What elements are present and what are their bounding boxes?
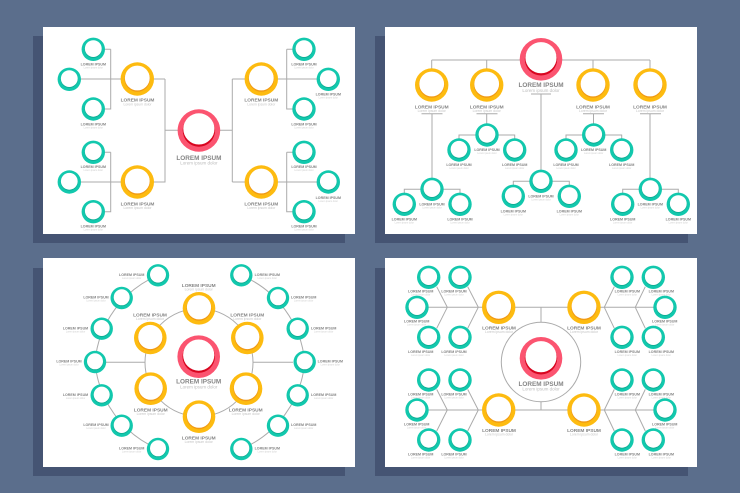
node: gold: LOREM IPSUM: [182, 436, 216, 442]
node: teal: Lorem ipsum dolor: [652, 294, 671, 297]
node: teal right: Lorem ipsum dolor: [294, 299, 314, 302]
central node: LOREM IPSUM: [176, 155, 221, 162]
node: teal: [441, 368, 472, 399]
node: teal cluster D right: LOREM IPSUM: [609, 163, 634, 167]
node: teal right: LOREM IPSUM: [311, 326, 336, 330]
node: teal: Lorem ipsum dolor: [407, 426, 427, 429]
node: teal cluster E left: Lorem ipsum dolor: [613, 221, 633, 224]
node: gold: Lorem ipsum dolor: [136, 317, 165, 321]
node: teal right: LOREM IPSUM: [311, 393, 336, 397]
node: teal cluster C right: [557, 185, 582, 216]
node: teal right: [267, 414, 316, 437]
node: teal cluster D top: LOREM IPSUM: [581, 148, 606, 152]
node: teal: LOREM IPSUM: [408, 350, 433, 354]
node: teal: [441, 326, 472, 357]
node: teal cluster D left: LOREM IPSUM: [553, 163, 579, 167]
node: teal: Lorem ipsum dolor: [411, 294, 431, 297]
node: teal left: [119, 438, 169, 460]
node: teal right: Lorem ipsum dolor: [314, 397, 334, 400]
node: teal: LOREM IPSUM: [615, 350, 640, 354]
node: gold top right: [244, 62, 278, 106]
node: teal: LOREM IPSUM: [81, 225, 106, 229]
node: teal cluster B right: LOREM IPSUM: [502, 163, 527, 167]
node: gold bottom left: LOREM IPSUM: [121, 201, 154, 207]
node: teal: Lorem ipsum dolor: [84, 66, 103, 69]
node: teal cluster B left: Lorem ipsum dolor: [449, 167, 469, 170]
node: teal right: Lorem ipsum dolor: [321, 363, 340, 366]
node: teal: LOREM IPSUM: [404, 422, 429, 426]
node: teal left: LOREM IPSUM: [83, 295, 109, 299]
node: teal: Lorem ipsum dolor: [618, 457, 637, 460]
node: teal: LOREM IPSUM: [291, 123, 317, 127]
node: teal right: [230, 438, 280, 460]
node: teal: LOREM IPSUM: [408, 392, 433, 396]
node: teal right: Lorem ipsum dolor: [294, 427, 314, 430]
central node: LOREM IPSUM: [176, 378, 221, 386]
node: teal: [408, 326, 440, 357]
node: gold bottom left: Lorem ipsum dolor: [123, 206, 152, 210]
node: teal: [291, 97, 317, 130]
node: teal: [81, 38, 106, 69]
node: teal: LOREM IPSUM: [652, 422, 677, 426]
node: teal cluster A top: LOREM IPSUM: [419, 202, 445, 206]
node: gold: Lorem ipsum dolor: [570, 330, 599, 334]
node: teal: Lorem ipsum dolor: [444, 294, 464, 297]
node: teal left: LOREM IPSUM: [56, 359, 82, 363]
node: gold: LOREM IPSUM: [229, 408, 263, 414]
node: teal: LOREM IPSUM: [649, 350, 674, 354]
node: teal: Lorem ipsum dolor: [652, 354, 671, 357]
node: teal: [58, 170, 81, 194]
node: teal: LOREM IPSUM: [441, 453, 467, 457]
node: teal cluster A top: Lorem ipsum dolor: [422, 206, 442, 209]
node: teal left: [63, 318, 113, 340]
node: teal right: Lorem ipsum dolor: [314, 330, 334, 333]
node: gold: Lorem ipsum dolor: [418, 109, 447, 113]
node: teal: LOREM IPSUM: [649, 392, 674, 396]
central node: [176, 335, 221, 389]
node: gold: LOREM IPSUM: [470, 104, 504, 110]
node: gold top left: Lorem ipsum dolor: [123, 102, 152, 106]
node: gold bottom left: [121, 165, 154, 210]
node: teal: LOREM IPSUM: [81, 165, 106, 169]
node: gold: Lorem ipsum dolor: [485, 330, 514, 334]
node: gold bottom right: LOREM IPSUM: [244, 201, 278, 207]
central node: Lorem ipsum dolor: [180, 161, 218, 166]
node: teal cluster C left: [501, 185, 526, 216]
node: teal: Lorem ipsum dolor: [294, 66, 314, 69]
node: teal cluster D left: [553, 138, 579, 170]
node: teal right: Lorem ipsum dolor: [258, 277, 277, 280]
node: teal cluster E right: Lorem ipsum dolor: [669, 221, 688, 224]
node: teal left: [83, 287, 133, 309]
node: gold: LOREM IPSUM: [567, 428, 601, 434]
node: gold: LOREM IPSUM: [182, 283, 216, 289]
node: teal left: [119, 264, 169, 286]
node: teal cluster B right: Lorem ipsum dolor: [505, 167, 525, 170]
node: teal: LOREM IPSUM: [649, 453, 674, 457]
node: gold: Lorem ipsum dolor: [636, 109, 665, 113]
node: teal right: [294, 351, 343, 373]
node: teal: [441, 428, 472, 460]
node: teal cluster A right: Lorem ipsum dolor: [450, 221, 470, 224]
node: teal cluster E top: Lorem ipsum dolor: [641, 206, 660, 209]
node: teal: Lorem ipsum dolor: [294, 169, 314, 172]
node: teal: LOREM IPSUM: [615, 290, 640, 294]
node: teal cluster A left: [392, 193, 417, 224]
node: teal: Lorem ipsum dolor: [294, 127, 314, 130]
node: gold top left: LOREM IPSUM: [121, 98, 154, 104]
node: teal: LOREM IPSUM: [291, 165, 317, 169]
node: teal cluster B top: [474, 123, 500, 155]
node: teal right: Lorem ipsum dolor: [258, 450, 277, 453]
node: teal left: Lorem ipsum dolor: [122, 277, 142, 280]
node: teal: [81, 97, 106, 130]
node: teal: LOREM IPSUM: [291, 225, 317, 229]
node: teal: Lorem ipsum dolor: [618, 354, 637, 357]
node: teal left: LOREM IPSUM: [83, 423, 109, 427]
node: gold: [182, 400, 216, 444]
node: teal: [81, 141, 106, 172]
node: teal: [408, 266, 440, 297]
node: teal: Lorem ipsum dolor: [618, 294, 637, 297]
node: teal: [642, 368, 674, 399]
node: teal left: LOREM IPSUM: [63, 393, 88, 397]
node: gold: LOREM IPSUM: [134, 408, 168, 414]
node: teal: LOREM IPSUM: [441, 350, 467, 354]
node: gold: LOREM IPSUM: [482, 325, 516, 331]
node: teal: Lorem ipsum dolor: [652, 457, 671, 460]
panel: radial map: [33, 258, 355, 476]
node: teal cluster D left: Lorem ipsum dolor: [556, 167, 576, 170]
node: teal: Lorem ipsum dolor: [411, 354, 431, 357]
node: gold: Lorem ipsum dolor: [473, 109, 502, 113]
node: teal: [291, 141, 317, 172]
node: gold: Lorem ipsum dolor: [233, 317, 262, 321]
node: gold: LOREM IPSUM: [230, 313, 264, 319]
node: teal cluster C right: LOREM IPSUM: [557, 209, 582, 213]
panel: symmetric tree: [33, 27, 355, 243]
node: teal cluster A right: LOREM IPSUM: [447, 217, 473, 221]
node: teal right: LOREM IPSUM: [255, 446, 280, 450]
node: teal cluster C top: LOREM IPSUM: [528, 194, 554, 198]
node: teal: Lorem ipsum dolor: [411, 396, 431, 399]
node: gold: [576, 68, 610, 113]
node: teal: [441, 266, 472, 297]
central node: Lorem ipsum dolor: [180, 384, 218, 389]
node: teal left: Lorem ipsum dolor: [59, 363, 79, 366]
node: teal cluster E right: [666, 193, 691, 224]
node: teal: [652, 296, 677, 327]
node: gold: [633, 68, 667, 113]
node: teal cluster B top: Lorem ipsum dolor: [477, 152, 497, 155]
node: gold: [230, 313, 264, 354]
node: gold: LOREM IPSUM: [415, 104, 449, 110]
node: teal: Lorem ipsum dolor: [655, 426, 675, 429]
node: teal: Lorem ipsum dolor: [84, 169, 103, 172]
central node: [518, 38, 564, 93]
node: teal: Lorem ipsum dolor: [294, 229, 314, 232]
node: teal right: [286, 384, 336, 406]
node: gold: Lorem ipsum dolor: [579, 109, 608, 113]
node: teal left: Lorem ipsum dolor: [66, 397, 85, 400]
node: teal: LOREM IPSUM: [404, 320, 429, 324]
node: teal: [652, 398, 677, 429]
node: gold: Lorem ipsum dolor: [137, 412, 166, 416]
node: teal cluster D right: Lorem ipsum dolor: [612, 167, 632, 170]
node: teal right: [230, 264, 280, 286]
node: teal cluster A left: LOREM IPSUM: [392, 217, 417, 221]
node: gold bottom right: Lorem ipsum dolor: [247, 206, 276, 210]
node: teal: Lorem ipsum dolor: [319, 96, 338, 99]
node: gold: LOREM IPSUM: [567, 325, 601, 331]
node: teal: Lorem ipsum dolor: [655, 324, 675, 327]
node: teal cluster E top: [638, 178, 663, 209]
node: teal: [408, 368, 440, 399]
node: teal left: Lorem ipsum dolor: [66, 330, 85, 333]
node: teal: Lorem ipsum dolor: [444, 457, 464, 460]
node: teal left: LOREM IPSUM: [119, 273, 144, 277]
node: teal cluster B left: LOREM IPSUM: [446, 163, 472, 167]
node: teal left: Lorem ipsum dolor: [86, 427, 106, 430]
node: teal cluster A right: [447, 193, 473, 224]
node: teal: LOREM IPSUM: [291, 62, 317, 66]
node: teal: [81, 200, 106, 232]
panel: org chart: [375, 27, 697, 243]
node: teal left: Lorem ipsum dolor: [86, 299, 106, 302]
node: teal: [610, 266, 640, 297]
node: teal: [610, 326, 640, 357]
node: teal: Lorem ipsum dolor: [319, 200, 338, 203]
node: teal left: [56, 351, 106, 373]
central node: LOREM IPSUM: [518, 381, 564, 388]
node: teal: Lorem ipsum dolor: [84, 229, 103, 232]
node: teal cluster A top: [419, 178, 445, 209]
node: gold: [470, 68, 504, 113]
node: teal: [404, 296, 429, 327]
node: teal left: [83, 414, 133, 437]
node: teal right: LOREM IPSUM: [318, 359, 343, 363]
node: teal: LOREM IPSUM: [441, 392, 467, 396]
central node: [518, 337, 564, 392]
node: teal: LOREM IPSUM: [81, 123, 106, 127]
node: teal: LOREM IPSUM: [615, 453, 640, 457]
node: gold: LOREM IPSUM: [482, 428, 516, 434]
node: teal: Lorem ipsum dolor: [444, 396, 464, 399]
node: teal cluster E left: LOREM IPSUM: [610, 217, 635, 221]
central node: Lorem ipsum dolor: [522, 88, 560, 93]
node: teal left: Lorem ipsum dolor: [122, 450, 142, 453]
node: teal: LOREM IPSUM: [408, 453, 433, 457]
node: teal cluster E right: LOREM IPSUM: [666, 217, 691, 221]
node: gold: [415, 68, 449, 113]
node: teal: Lorem ipsum dolor: [444, 354, 464, 357]
node: teal: [642, 326, 674, 357]
node: teal cluster E top: LOREM IPSUM: [638, 202, 663, 206]
node: teal left: [63, 384, 113, 406]
node: gold: Lorem ipsum dolor: [185, 440, 214, 444]
node: teal right: [286, 318, 336, 340]
central node: LOREM IPSUM: [518, 82, 564, 89]
node: teal cluster C top: [528, 170, 554, 201]
node: gold: [134, 372, 168, 416]
node: gold: [482, 393, 516, 437]
node: teal: [291, 200, 317, 232]
node: teal: Lorem ipsum dolor: [652, 396, 671, 399]
node: teal: [610, 428, 640, 460]
node: teal: [58, 68, 81, 91]
node: teal cluster B left: [446, 138, 472, 170]
node: gold: LOREM IPSUM: [633, 104, 667, 110]
node: gold: [567, 291, 601, 334]
node: gold: Lorem ipsum dolor: [485, 433, 514, 437]
node: gold: [567, 393, 601, 437]
node: gold top left: [121, 62, 154, 106]
node: teal: [291, 38, 317, 69]
node: teal cluster B right: [502, 138, 527, 170]
node: gold: Lorem ipsum dolor: [185, 287, 214, 291]
central node: [176, 109, 221, 166]
node: teal: LOREM IPSUM: [652, 320, 677, 324]
node: teal: [404, 398, 429, 429]
node: teal cluster E left: [610, 193, 635, 224]
node: teal: LOREM IPSUM: [316, 92, 341, 96]
node: gold: Lorem ipsum dolor: [232, 412, 261, 416]
node: teal: LOREM IPSUM: [441, 290, 467, 294]
node: gold: LOREM IPSUM: [576, 104, 610, 110]
node: teal: [610, 368, 640, 399]
node: teal: [316, 170, 341, 203]
node: teal cluster D top: [581, 123, 606, 155]
node: teal: LOREM IPSUM: [615, 392, 640, 396]
node: teal: LOREM IPSUM: [649, 290, 674, 294]
node: teal: [408, 428, 440, 460]
node: teal left: LOREM IPSUM: [63, 326, 88, 330]
node: teal: Lorem ipsum dolor: [411, 457, 431, 460]
node: teal: [316, 68, 341, 99]
node: gold top right: LOREM IPSUM: [244, 98, 278, 104]
node: teal: Lorem ipsum dolor: [407, 324, 427, 327]
node: teal right: LOREM IPSUM: [291, 295, 316, 299]
node: teal cluster A left: Lorem ipsum dolor: [395, 221, 414, 224]
node: gold: LOREM IPSUM: [133, 313, 167, 319]
node: teal: Lorem ipsum dolor: [84, 127, 103, 130]
node: teal: [642, 428, 674, 460]
node: gold: Lorem ipsum dolor: [570, 433, 599, 437]
node: gold top right: Lorem ipsum dolor: [247, 102, 276, 106]
node: teal: LOREM IPSUM: [81, 62, 106, 66]
node: teal: LOREM IPSUM: [408, 290, 433, 294]
node: teal right: LOREM IPSUM: [291, 423, 316, 427]
node: teal cluster C top: Lorem ipsum dolor: [531, 198, 551, 201]
node: gold: [229, 372, 263, 416]
node: teal cluster C right: Lorem ipsum dolor: [560, 213, 579, 216]
node: teal right: [267, 287, 316, 309]
node: teal cluster D top: Lorem ipsum dolor: [584, 152, 604, 155]
node: teal left: LOREM IPSUM: [119, 446, 144, 450]
node: teal: LOREM IPSUM: [316, 196, 341, 200]
node: teal: Lorem ipsum dolor: [618, 396, 637, 399]
node: teal cluster D right: [609, 138, 634, 170]
node: gold: [133, 313, 167, 354]
node: gold bottom right: [244, 165, 278, 210]
node: teal: [642, 266, 674, 297]
node: gold: [482, 291, 516, 334]
node: gold: [182, 283, 216, 325]
central node: Lorem ipsum dolor: [522, 387, 560, 392]
node: teal right: LOREM IPSUM: [255, 273, 280, 277]
node: teal cluster C left: Lorem ipsum dolor: [504, 213, 523, 216]
node: teal cluster C left: LOREM IPSUM: [501, 209, 526, 213]
node: teal cluster B top: LOREM IPSUM: [474, 148, 500, 152]
panel: fishbone map: [375, 258, 697, 476]
